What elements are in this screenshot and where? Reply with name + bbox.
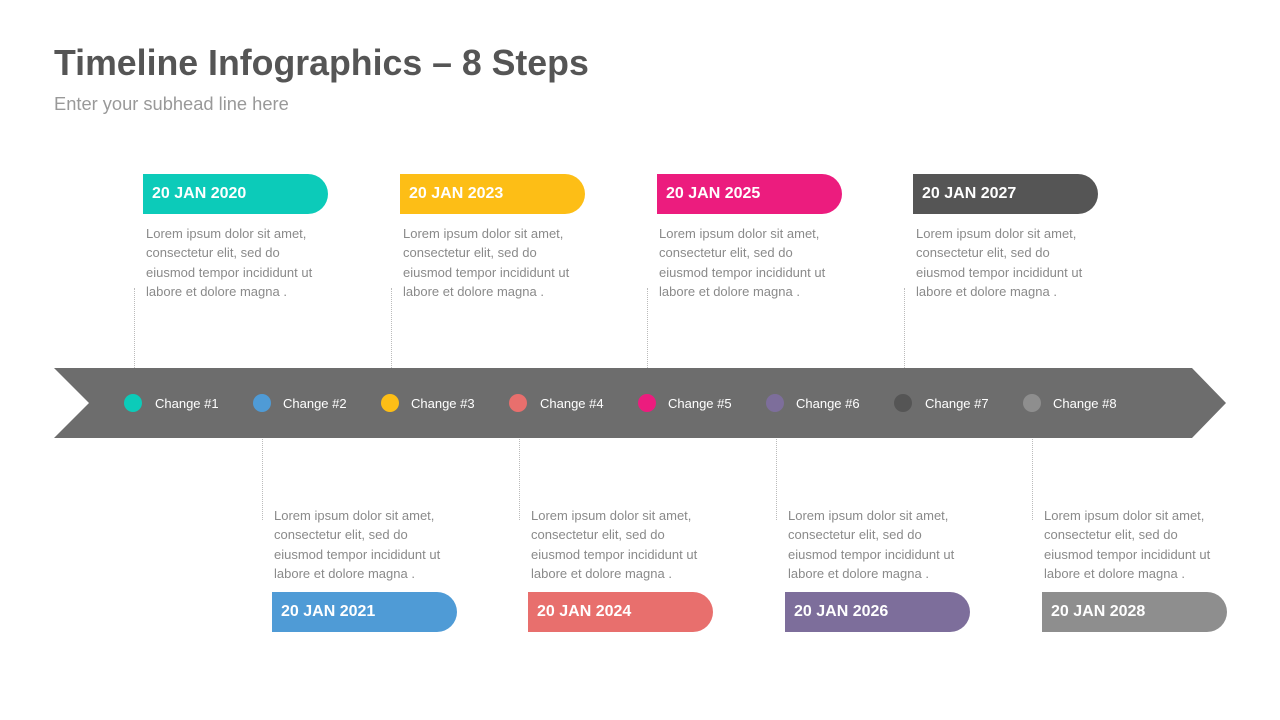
step 1: Lorem ipsum dolor sit amet, consectetur elit, sed do eiusmod tempor incididunt ut labore et dolore magna . [146, 226, 312, 299]
step 5 [657, 174, 842, 299]
step 6 [785, 508, 970, 632]
step 5: Lorem ipsum dolor sit amet, consectetur elit, sed do eiusmod tempor incididunt ut labore et dolore magna . [659, 226, 825, 299]
step 6: 20 JAN 2026 [794, 603, 888, 620]
timeline arrow band: Change #1 [155, 396, 219, 411]
step 3: Lorem ipsum dolor sit amet, consectetur elit, sed do eiusmod tempor incididunt ut labore et dolore magna . [403, 226, 569, 299]
step 7 [913, 174, 1098, 299]
step 5: 20 JAN 2025 [666, 185, 760, 202]
timeline arrow band: Change #7 [925, 396, 989, 411]
step 3: 20 JAN 2023 [409, 185, 503, 202]
timeline arrow band: Change #6 [796, 396, 860, 411]
step 7: 20 JAN 2027 [922, 185, 1016, 202]
timeline arrow band: Change #5 [668, 396, 732, 411]
timeline arrow band: Change #3 [411, 396, 475, 411]
timeline arrow band: Change #8 [1053, 396, 1117, 411]
step 8 [1042, 508, 1227, 632]
subtitle: Enter your subhead line here [54, 93, 289, 114]
step 2: 20 JAN 2021 [281, 603, 375, 620]
step 6: Lorem ipsum dolor sit amet, consectetur elit, sed do eiusmod tempor incididunt ut labore et dolore magna . [788, 508, 954, 581]
step 2: Lorem ipsum dolor sit amet, consectetur elit, sed do eiusmod tempor incididunt ut labore et dolore magna . [274, 508, 440, 581]
step 4 [528, 508, 713, 632]
timeline arrow band: Change #2 [283, 396, 347, 411]
step 3 [400, 174, 585, 299]
step 4: 20 JAN 2024 [537, 603, 631, 620]
step 4: Lorem ipsum dolor sit amet, consectetur elit, sed do eiusmod tempor incididunt ut labore et dolore magna . [531, 508, 697, 581]
step 8: 20 JAN 2028 [1051, 603, 1145, 620]
step 7: Lorem ipsum dolor sit amet, consectetur elit, sed do eiusmod tempor incididunt ut labore et dolore magna . [916, 226, 1082, 299]
step 8: Lorem ipsum dolor sit amet, consectetur elit, sed do eiusmod tempor incididunt ut labore et dolore magna . [1044, 508, 1210, 581]
step 2 [272, 508, 457, 632]
step 1: 20 JAN 2020 [152, 185, 246, 202]
timeline arrow band: Change #4 [540, 396, 604, 411]
title: Timeline Infographics – 8 Steps [54, 43, 589, 83]
step 1 [143, 174, 328, 299]
